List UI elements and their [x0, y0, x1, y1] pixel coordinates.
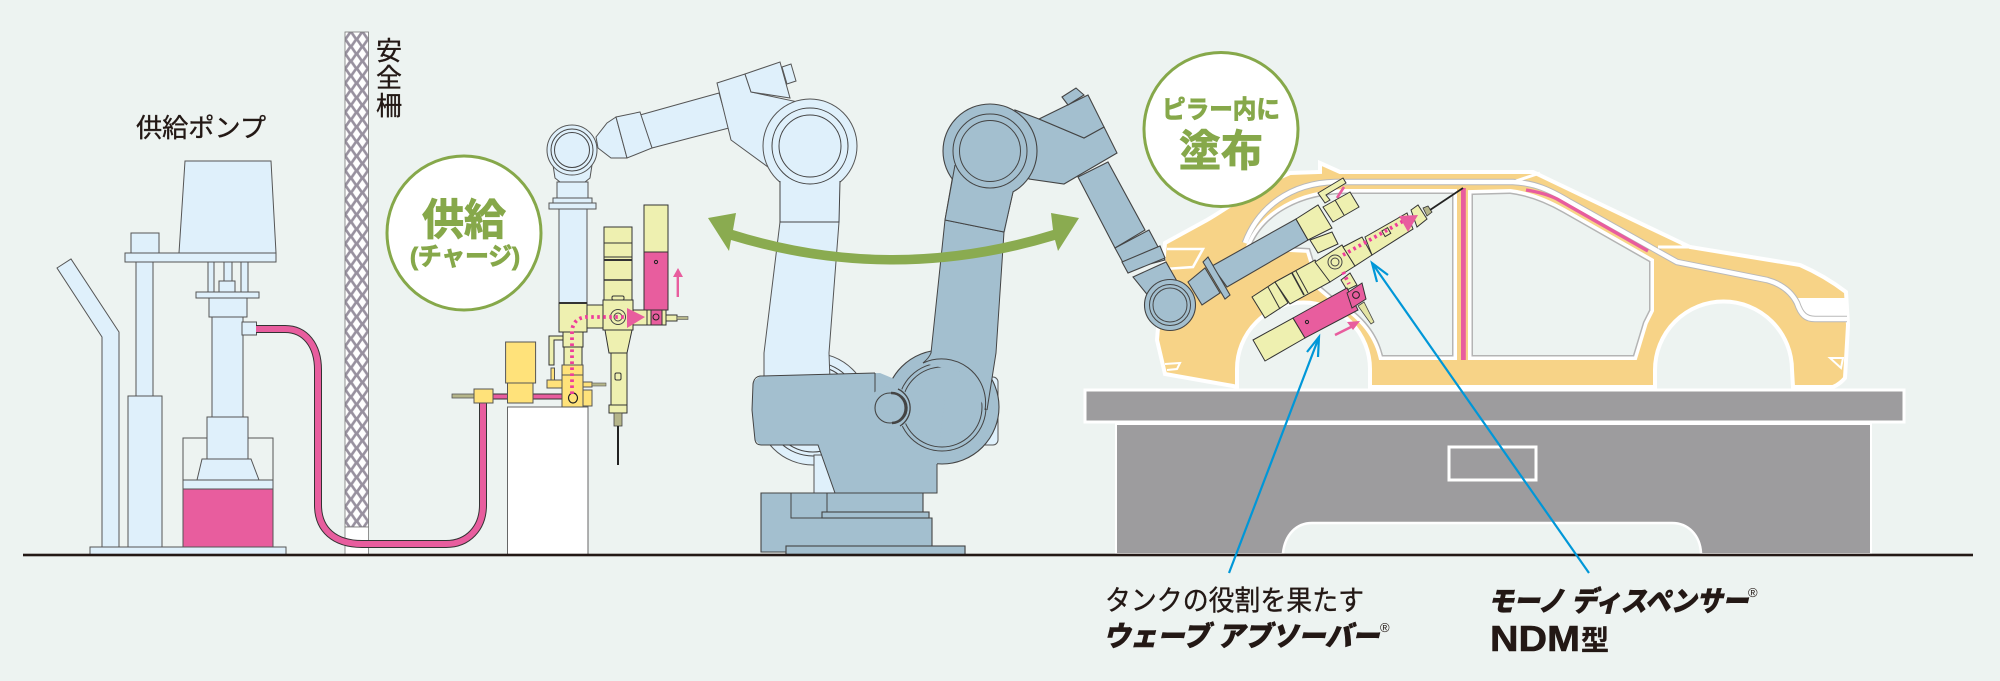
callout: coat inside pillar — [1144, 52, 1298, 206]
arrow: absorber discharge — [1335, 321, 1360, 335]
charge station block — [452, 342, 563, 403]
workbench — [1085, 390, 1904, 555]
white pedestal — [508, 407, 588, 555]
callout: supply charge: 供給 — [422, 197, 506, 245]
caption: wave absorber: タンクの役割を果たす — [1105, 585, 1364, 616]
ground line — [23, 554, 1973, 556]
arrow: absorber rise — [673, 268, 683, 297]
caption: mohno dispenser: 型 — [1581, 625, 1609, 656]
caption: mohno dispenser: NDM — [1490, 618, 1580, 659]
callout: coat inside pillar: 塗布 — [1179, 128, 1263, 176]
green double arrow — [708, 213, 1079, 264]
caption: wave absorber — [1103, 585, 1390, 652]
caption: mohno dispenser: モーノ ディスペンサー — [1488, 586, 1749, 617]
dispenser head at coating position — [1252, 178, 1463, 361]
safety fence — [345, 32, 368, 555]
label: safety fence: 安 — [376, 36, 402, 66]
arrow: dispenser leader — [1372, 263, 1589, 573]
caption: wave absorber: ウェーブ アブソーバー — [1103, 621, 1380, 652]
supply pump — [57, 161, 286, 555]
flow path: coating — [1343, 215, 1418, 284]
arrow: wave absorber leader — [1229, 337, 1319, 573]
label: safety fence: 全 — [376, 63, 402, 93]
callout: supply charge: (チャージ) — [410, 243, 520, 271]
label: supply pump: 供給ポンプ — [136, 113, 266, 143]
light robot (charge position) — [547, 62, 998, 493]
hose — [256, 329, 483, 544]
caption: mohno dispenser — [1488, 585, 1758, 659]
dark robot (coating position) — [752, 88, 1308, 555]
callout: coat inside pillar: ピラー内に — [1162, 96, 1280, 124]
caption: wave absorber: ® — [1380, 620, 1390, 635]
label: safety fence: 柵 — [376, 91, 402, 121]
callout: supply charge — [387, 156, 541, 310]
caption: mohno dispenser: ® — [1748, 585, 1758, 600]
car body — [1157, 163, 1848, 387]
flow path: charge — [572, 308, 645, 394]
dispenser head at charge position — [547, 205, 688, 465]
